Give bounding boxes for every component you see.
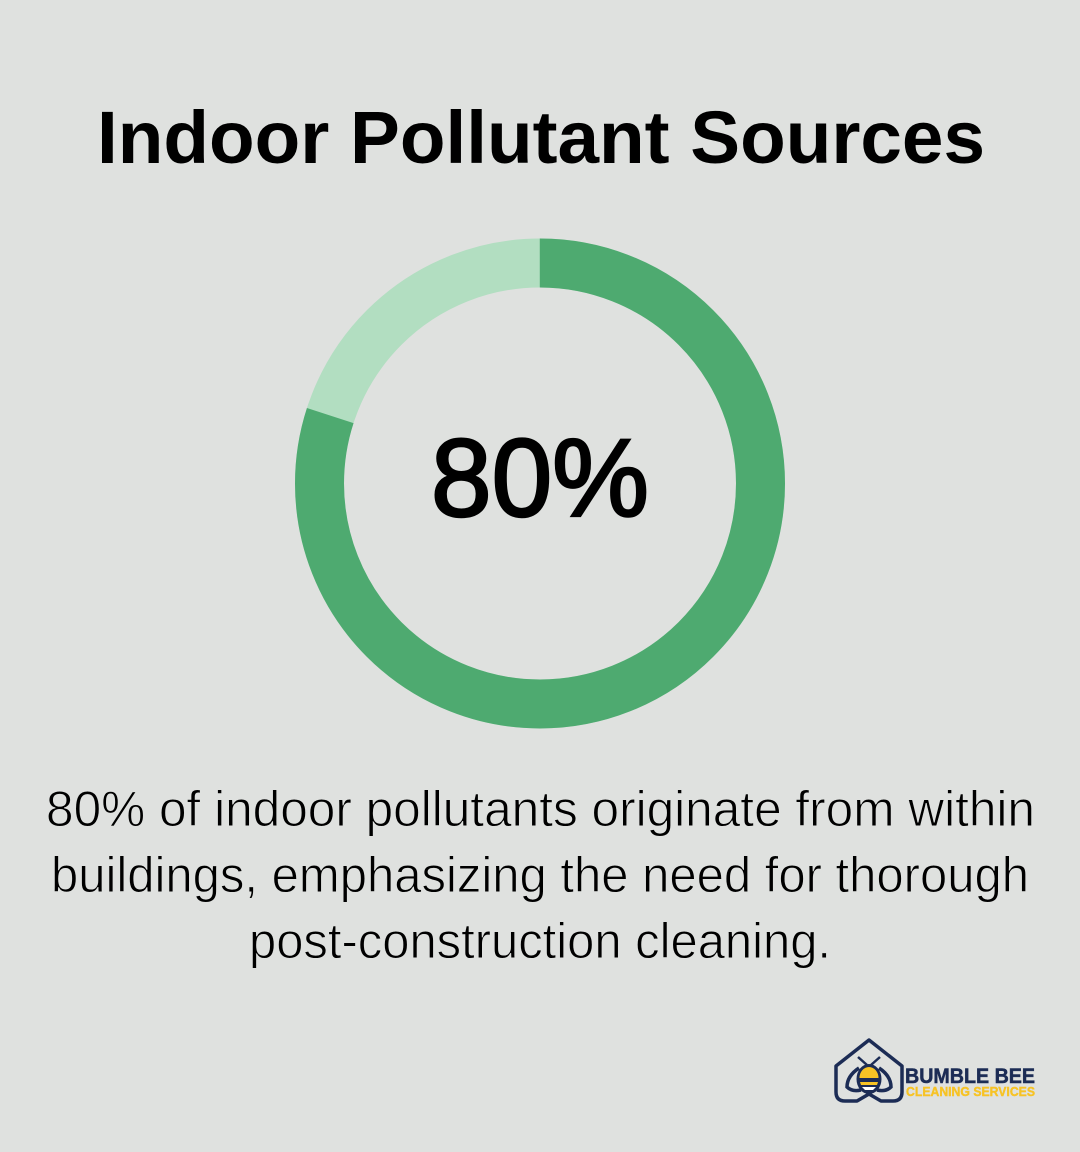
description text: post-construction cleaning. xyxy=(249,913,831,969)
icon: house with bee xyxy=(836,1040,902,1101)
logo tagline: CLEANING SERVICES xyxy=(906,1085,1035,1099)
ring segment: remaining 20 percent xyxy=(320,263,760,704)
description text: buildings, emphasizing the need for thorough xyxy=(51,847,1029,903)
description text: 80% of indoor pollutants originate from within xyxy=(46,781,1035,837)
logo: Bumble Bee Cleaning Services xyxy=(836,1040,1035,1101)
title: Indoor Pollutant Sources xyxy=(97,96,985,179)
description text xyxy=(46,781,1035,969)
donut chart: 80 percent xyxy=(320,263,760,704)
ring segment: 80 percent xyxy=(320,263,760,704)
donut center value: 80% xyxy=(431,417,649,540)
logo wordmark: BUMBLE BEE xyxy=(905,1065,1035,1088)
